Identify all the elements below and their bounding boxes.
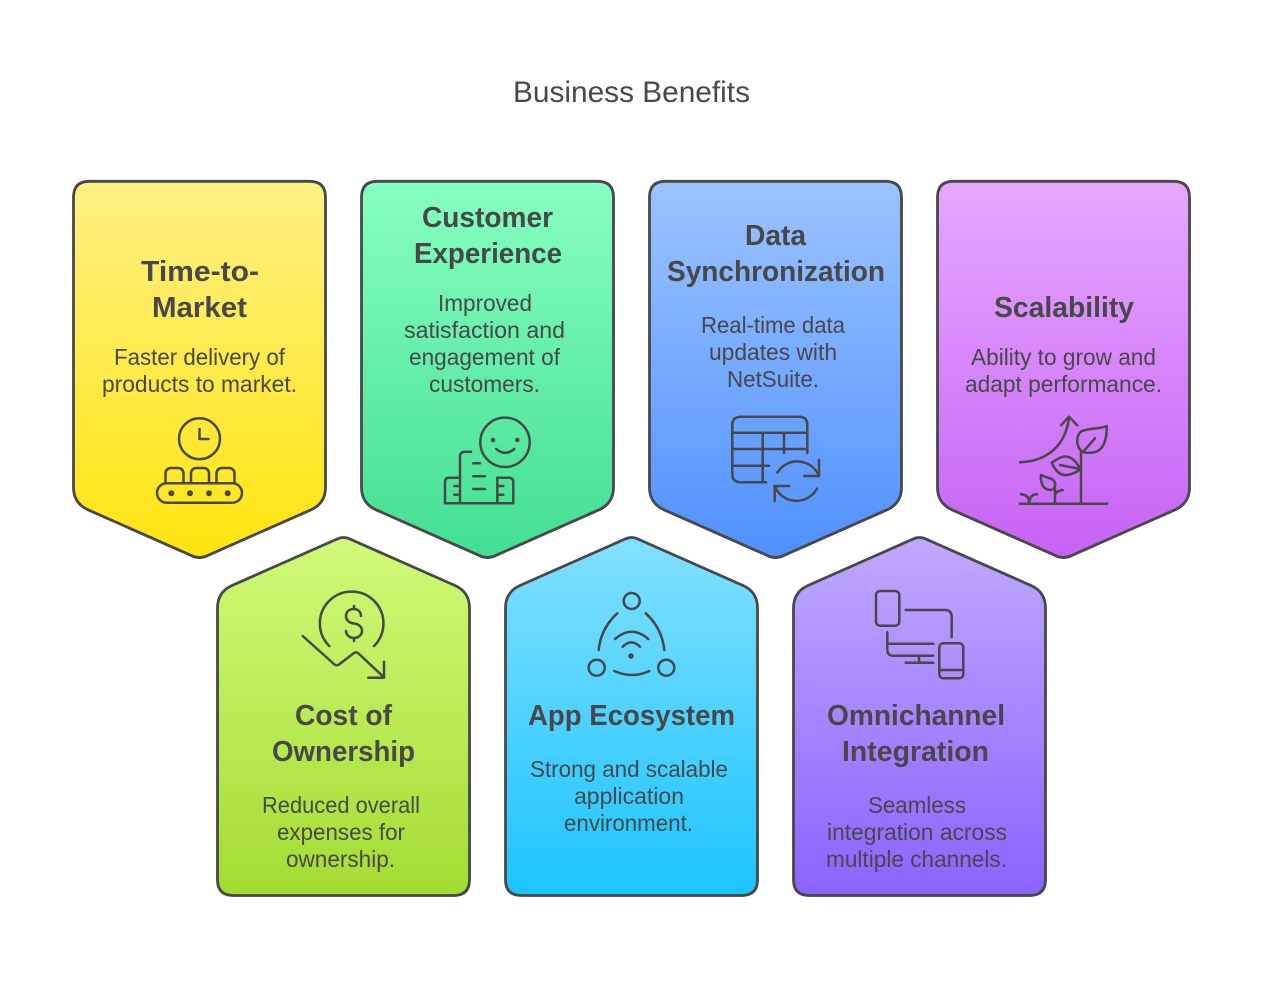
- heading: Customer Experience: Customer: [422, 202, 553, 234]
- panel: Data Synchronization: [650, 181, 902, 558]
- heading: Omnichannel Integration: Integration: [842, 736, 989, 768]
- description: Data Synchronization: updates with: [709, 339, 837, 365]
- description: Data Synchronization: Real-time data: [701, 312, 845, 338]
- description: Cost of Ownership: Reduced overall: [262, 792, 420, 818]
- icon: growing plants with rising arrow: [1020, 417, 1107, 504]
- panel: Time-to-Market: [74, 181, 326, 558]
- panel: App Ecosystem: [506, 538, 758, 896]
- description: Cost of Ownership: ownership.: [286, 846, 395, 872]
- card shape: App Ecosystem: [506, 538, 758, 896]
- icon: connected nodes with wireless signal: [589, 593, 674, 676]
- panel: Customer Experience: [362, 181, 614, 558]
- description: App Ecosystem: [530, 756, 728, 836]
- icon: clock over conveyor belt: [157, 418, 242, 503]
- description: Scalability: adapt performance.: [965, 371, 1162, 397]
- description: App Ecosystem: application: [574, 783, 684, 809]
- description: Omnichannel Integration: Seamless: [868, 792, 966, 818]
- description: Time-to-Market: products to market.: [102, 371, 297, 397]
- heading: Cost of Ownership: Ownership: [272, 736, 415, 768]
- description: Customer Experience: customers.: [429, 371, 540, 397]
- icon: smiling face and building: [445, 418, 530, 503]
- description: Customer Experience: [404, 290, 565, 397]
- description: Cost of Ownership: [262, 792, 420, 872]
- description: App Ecosystem: environment.: [564, 810, 693, 836]
- description: Customer Experience: satisfaction and: [404, 317, 565, 343]
- description: Data Synchronization: [701, 312, 845, 392]
- heading: Cost of Ownership: Cost of: [295, 700, 392, 732]
- icon: table with sync arrows: [732, 417, 819, 501]
- icon: connected phone, monitor and tablet: [876, 591, 963, 678]
- heading: Omnichannel Integration: [827, 700, 1005, 768]
- card shape: Time-to-Market: [74, 181, 326, 558]
- description: Scalability: [965, 344, 1162, 397]
- heading: Scalability: Scalability: [994, 292, 1134, 324]
- heading: Omnichannel Integration: Omnichannel: [827, 700, 1005, 732]
- description: Scalability: Ability to grow and: [971, 344, 1156, 370]
- title: Business Benefits: [513, 76, 750, 109]
- icon: dollar coin with falling arrow: [303, 592, 384, 678]
- heading: App Ecosystem: App Ecosystem: [528, 700, 735, 732]
- description: Omnichannel Integration: integration across: [827, 819, 1007, 845]
- heading: Time-to-Market: [141, 256, 259, 324]
- description: Data Synchronization: NetSuite.: [727, 366, 819, 392]
- heading: Time-to-Market: Time-to-: [141, 256, 259, 288]
- heading: Data Synchronization: Data: [745, 220, 807, 252]
- description: Time-to-Market: Faster delivery of: [114, 344, 286, 370]
- panel: Cost of Ownership: [218, 538, 470, 896]
- description: Omnichannel Integration: multiple channels.: [826, 846, 1007, 872]
- heading: Data Synchronization: Synchronization: [667, 256, 885, 288]
- card shape: Omnichannel Integration: [794, 538, 1046, 896]
- panel: Scalability: [938, 181, 1190, 558]
- description: Omnichannel Integration: [826, 792, 1007, 872]
- heading: Data Synchronization: [667, 220, 885, 288]
- card shape: Customer Experience: [362, 181, 614, 558]
- description: Customer Experience: Improved: [438, 290, 532, 316]
- description: App Ecosystem: Strong and scalable: [530, 756, 728, 782]
- description: Time-to-Market: [102, 344, 297, 397]
- card shape: Scalability: [938, 181, 1190, 558]
- heading: Customer Experience: Experience: [414, 238, 562, 270]
- heading: Cost of Ownership: [272, 700, 415, 768]
- description: Customer Experience: engagement of: [409, 344, 561, 370]
- card shape: Cost of Ownership: [218, 538, 470, 896]
- heading: Time-to-Market: Market: [152, 292, 247, 324]
- heading: Customer Experience: [414, 202, 562, 270]
- card shape: Data Synchronization: [650, 181, 902, 558]
- description: Cost of Ownership: expenses for: [277, 819, 405, 845]
- panel: Omnichannel Integration: [794, 538, 1046, 896]
